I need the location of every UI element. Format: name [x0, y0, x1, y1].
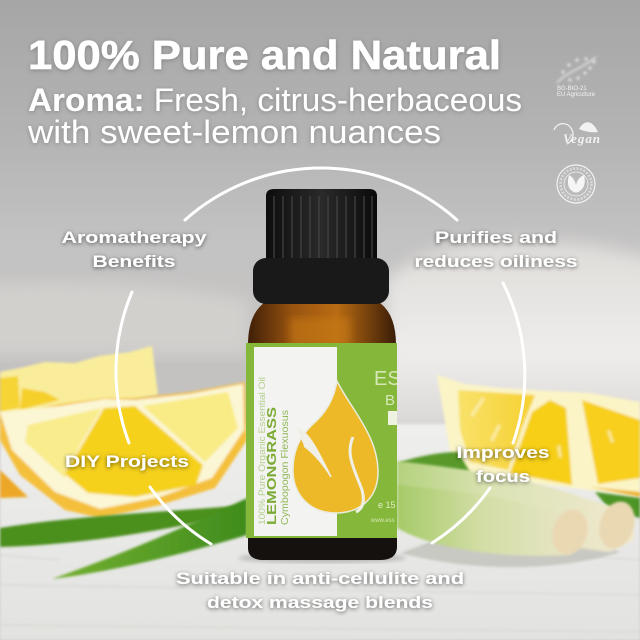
- icon: vegan: Vegan: [563, 131, 600, 146]
- rotated product text: [257, 377, 291, 525]
- label: [246, 343, 401, 538]
- label: aromatherapy benefits: Benefits: [92, 252, 176, 271]
- glass neck highlight: [290, 318, 350, 345]
- icon: EU organic leaf: EU Agriculture: [557, 92, 596, 98]
- glass shoulder: [248, 303, 396, 345]
- icon: no animal testing: [557, 165, 595, 203]
- circular arc segments: [116, 168, 525, 544]
- label: purifies: reduces oiliness: [414, 252, 578, 271]
- label: aromatherapy benefits: [62, 228, 207, 271]
- title: 100% Pure and Natural: [28, 32, 501, 78]
- icon: vegan: [554, 122, 600, 146]
- rotated product text: Cymbopogon Flexuosus: [280, 410, 291, 525]
- icon: EU organic leaf: [557, 57, 596, 98]
- label: DIY projects: DIY Projects: [65, 452, 189, 471]
- subtitle line 1: Aroma: Fresh, citrus-herbaceous: [28, 82, 522, 118]
- label: massage blends: [176, 569, 464, 612]
- label: massage blends: Suitable in anti-cellulite and: [176, 569, 464, 588]
- lemon front left: [0, 382, 247, 518]
- glass base: [248, 535, 397, 560]
- label: e 15: [378, 500, 396, 510]
- subtitle line 2: with sweet-lemon nuances: [27, 114, 441, 150]
- label: aromatherapy benefits: Aromatherapy: [62, 228, 207, 247]
- lemon back left: [0, 346, 158, 498]
- rotated product text: 100% Pure Organic Essential Oil: [257, 377, 268, 525]
- icon: EU organic leaf: BG-BIO-21: [557, 86, 587, 92]
- label: improves focus: focus: [476, 467, 530, 486]
- dropper cap: [253, 189, 389, 304]
- rotated product text: LEMONGRASS: [265, 407, 279, 525]
- label: improves focus: Improves: [456, 443, 550, 462]
- label: improves focus: [456, 443, 550, 486]
- icon: yellow drop: [293, 381, 378, 513]
- lemongrass stalks: [397, 461, 640, 567]
- label: purifies: Purifies and: [435, 228, 557, 247]
- lemon wedge right: [437, 375, 640, 498]
- label: B: [385, 392, 395, 409]
- bottle: [238, 189, 406, 563]
- lemongrass leaves: [0, 452, 640, 579]
- label: massage blends: detox massage blends: [207, 593, 433, 612]
- label: www.ess: [370, 518, 395, 524]
- brand text: ES: [374, 368, 401, 390]
- label: purifies: [414, 228, 578, 271]
